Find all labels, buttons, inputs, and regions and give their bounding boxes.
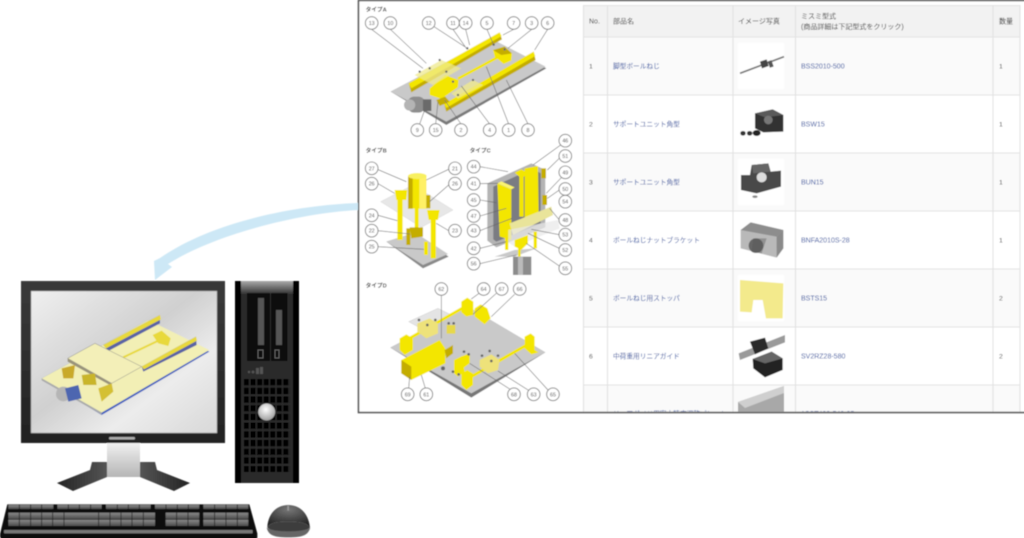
diagram: type B: 24 <box>369 213 375 219</box>
diagram: type C: 48 <box>562 218 568 224</box>
vent grille <box>244 379 290 472</box>
indicator lights <box>248 367 263 374</box>
diagram: type A: タイプA <box>366 5 387 13</box>
row 4: BNFA2010S-28 <box>801 238 850 244</box>
tower PC <box>235 281 299 483</box>
diagram: type A: 9 <box>416 128 419 134</box>
diagram: type A: 11 <box>450 21 456 27</box>
drive bays <box>247 293 288 361</box>
diagram: type A: 5 <box>486 21 489 27</box>
photo: nut bracket <box>741 222 783 258</box>
table header: 部品名 <box>613 16 634 26</box>
table row backgrounds <box>583 5 1020 420</box>
row 2 <box>588 120 1003 128</box>
row 2: 1 <box>999 122 1003 128</box>
diagram: type C: 54 <box>562 200 568 206</box>
diagram: type B <box>365 146 461 268</box>
diagram: type A: 10 <box>387 21 393 27</box>
diagram: type D: 64 <box>481 287 487 293</box>
row 3 <box>588 178 1003 186</box>
diagram: type C: 42 <box>471 246 477 252</box>
monitor screen <box>31 291 217 433</box>
diagram: type D: 63 <box>531 392 537 398</box>
diagram: type A: 12 <box>426 21 432 27</box>
diagram: type D: 67 <box>499 287 505 293</box>
row 4: 1 <box>999 238 1003 244</box>
monitor <box>21 281 225 491</box>
diagram: type C: 47 <box>471 214 477 220</box>
diagram: type D: 66 <box>517 287 523 293</box>
photo: support unit T shape <box>741 163 781 198</box>
diagram: type C: 55 <box>562 266 568 272</box>
table header: 数量 <box>999 16 1013 26</box>
row 5 <box>589 294 1003 302</box>
table header: No. <box>589 18 600 26</box>
diagram: type C: 44 <box>471 165 477 171</box>
diagram: type D: タイプD <box>366 282 387 290</box>
table header: ミスミ型式 <box>801 12 836 20</box>
diagram: type A: 8 <box>526 128 529 134</box>
diagram: type A: 6 <box>546 21 549 27</box>
row 2: BSW15 <box>801 122 825 128</box>
diagram: type A: 3 <box>530 21 533 27</box>
mouse <box>267 505 310 537</box>
table header <box>589 12 1013 31</box>
diagram: type D: 69 <box>405 392 411 398</box>
diagram: type C: タイプC <box>470 146 491 154</box>
diagram: type B: タイプB <box>366 146 387 154</box>
diagram: type C: 49 <box>562 170 568 176</box>
diagram: type C: 46 <box>562 139 568 145</box>
row 1: 脚型ボールねじ <box>613 62 660 70</box>
photo: ball screw <box>740 57 784 73</box>
row 6: SV2RZ28-580 <box>801 354 845 360</box>
bolts <box>418 319 499 376</box>
diagram: type C: 52 <box>562 248 568 254</box>
row 1: 1 <box>999 64 1003 70</box>
table header: イメージ写真 <box>738 16 780 26</box>
row 5: 2 <box>999 296 1003 302</box>
row 3: BUN15 <box>801 180 824 186</box>
keyboard <box>0 504 257 538</box>
diagram: type D <box>366 282 559 401</box>
row 5: ボールねじ用ストッパ <box>613 294 680 302</box>
space bar strip <box>4 530 253 533</box>
screen image: assembled CAD model <box>42 315 209 415</box>
monitor bezel <box>21 281 225 443</box>
diagram: type B: 26 <box>369 182 375 188</box>
row 4 <box>588 236 1003 244</box>
row 1 <box>589 62 1003 70</box>
diagram: type C: 51 <box>562 154 568 160</box>
diagram: type B: 27 <box>369 166 375 172</box>
row 3: 1 <box>999 180 1003 186</box>
diagram: type A: 13 <box>369 21 375 27</box>
diagram: type C: 45 <box>471 198 477 204</box>
photo: stopper <box>740 280 783 318</box>
diagram: type D: 68 <box>511 392 517 398</box>
tower top band <box>241 281 293 294</box>
diagram: type B: 26 <box>452 182 458 188</box>
photo: support unit square <box>740 109 783 136</box>
key dividers <box>19 505 237 526</box>
row 6 <box>588 352 1003 360</box>
row 7: 7 <box>589 411 593 418</box>
row 3: 3 <box>589 180 593 186</box>
arrow: flow from list to PC <box>154 203 358 280</box>
diagram: type A: 1 <box>507 128 510 134</box>
photo: linear guide <box>739 335 785 377</box>
power button <box>258 404 275 420</box>
diagram: type C <box>467 134 572 275</box>
diagram: type B: 21 <box>452 166 458 172</box>
row 7: 1 <box>999 411 1003 418</box>
diagram: type C: 56 <box>471 262 477 268</box>
diagram: type A: 14 <box>463 21 469 27</box>
diagram: type C: 41 <box>471 182 477 188</box>
diagram: type C: 43 <box>471 229 477 235</box>
row 6: 中荷重用リニアガイド <box>613 352 680 360</box>
diagram: type B: 23 <box>452 229 458 235</box>
row 4: ボールねじナットブラケット <box>613 236 700 244</box>
row 1: BSS2010-500 <box>801 64 845 70</box>
row 6: 6 <box>589 354 593 360</box>
row 7: リニアガイド用案内精度調整プレート <box>613 409 727 418</box>
diagram: type A: 15 <box>433 128 439 134</box>
diagram: type A: 2 <box>460 128 463 134</box>
diagram: type B: 22 <box>369 229 375 235</box>
row 2: 2 <box>589 122 593 128</box>
diagram: type B: 25 <box>369 245 375 251</box>
diagram: type A <box>365 5 554 136</box>
row 4: 4 <box>589 238 593 244</box>
function keys <box>8 505 248 509</box>
diagram: type D: 62 <box>438 287 444 293</box>
monitor power button <box>109 437 135 440</box>
panel: parts list screen <box>358 0 1024 420</box>
diagram: type A: 4 <box>488 128 491 134</box>
diagram: type D: 61 <box>423 392 429 398</box>
table header: (商品詳細は下記型式をクリック) <box>801 22 904 31</box>
row 6: 2 <box>999 354 1003 360</box>
row 1: 1 <box>589 64 593 70</box>
row 7 <box>614 386 854 412</box>
row 3: サポートユニット角型 <box>613 178 680 186</box>
diagram: type C: 50 <box>562 187 568 193</box>
bolts <box>418 43 506 96</box>
row 2: サポートユニット角型 <box>613 120 680 128</box>
diagram: type C: 53 <box>562 233 568 239</box>
monitor stand <box>57 443 190 491</box>
row 5: 5 <box>589 296 593 302</box>
diagram: type A: 7 <box>512 21 515 27</box>
row 7: 1SST400-540-35 <box>801 411 854 418</box>
diagram: type D: 65 <box>550 392 556 398</box>
main keys <box>8 513 248 526</box>
row 5: BSTS15 <box>801 296 827 302</box>
table: parts list <box>583 5 1020 420</box>
